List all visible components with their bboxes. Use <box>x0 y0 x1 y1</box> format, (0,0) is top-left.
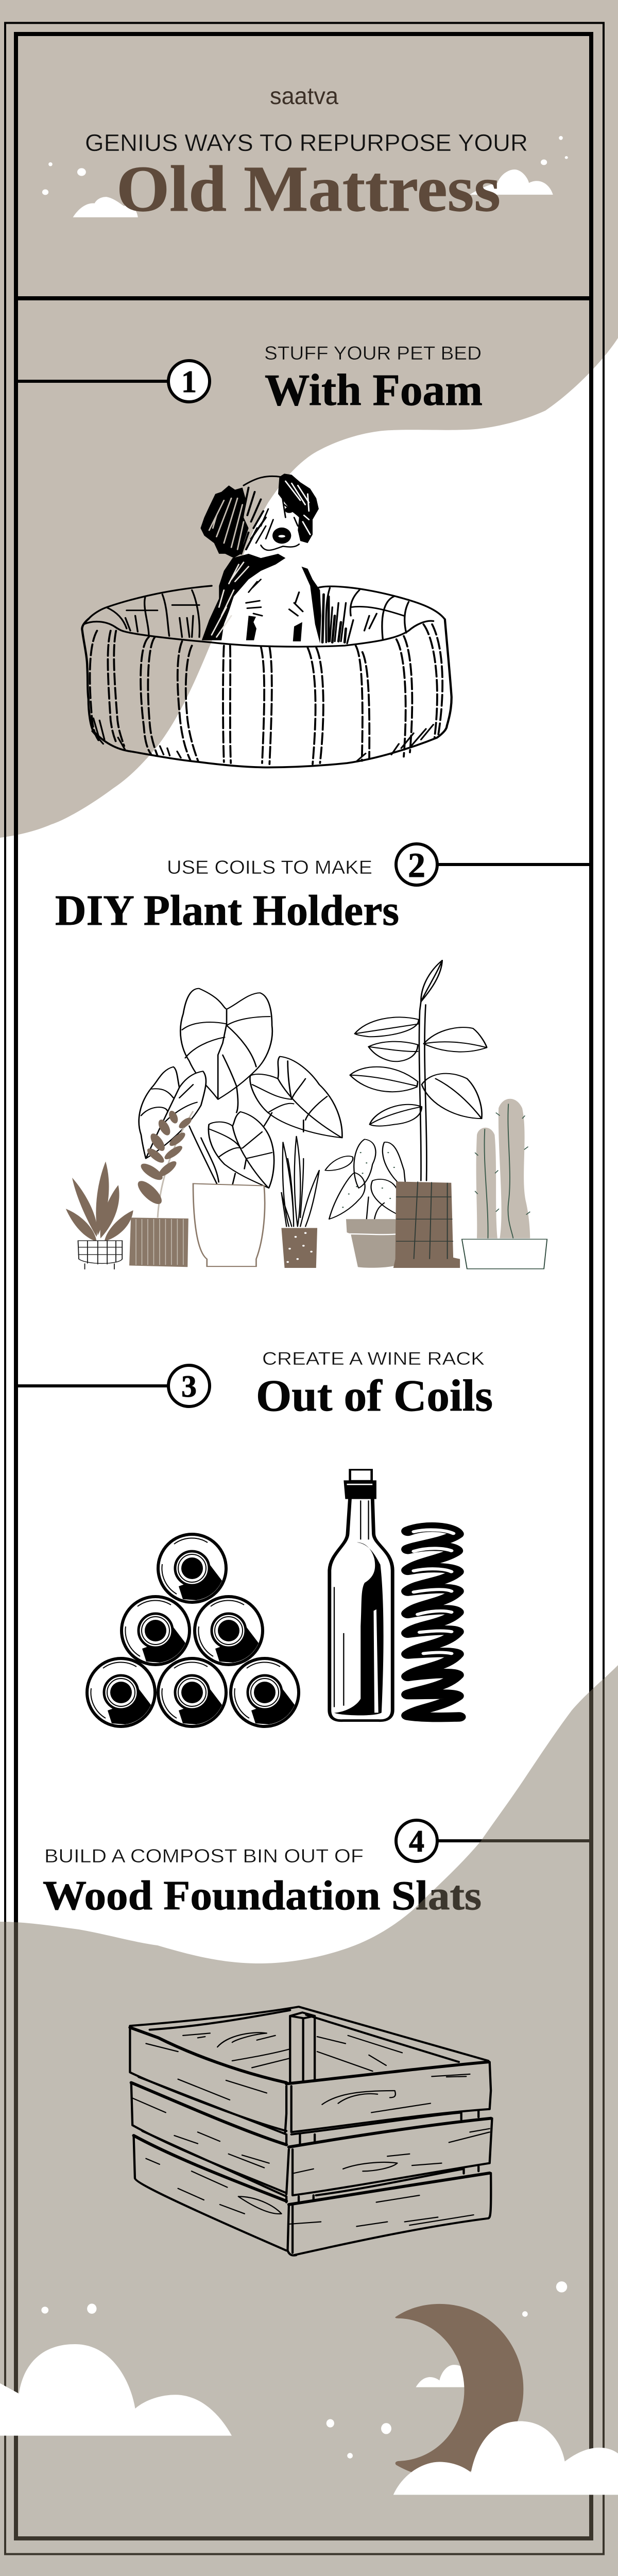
illustration: dog in pet bed <box>82 473 452 767</box>
step 3 marker <box>16 1365 210 1406</box>
illustration: mattress coil <box>408 1527 459 1717</box>
begonia in clay pot <box>325 1139 406 1268</box>
illustration: potted plants <box>66 960 547 1269</box>
step 4 marker: 4 <box>409 1824 424 1858</box>
left cloud <box>0 2344 232 2436</box>
right cloud <box>393 2421 618 2495</box>
bed stitching <box>90 624 442 764</box>
step 1 marker: 1 <box>181 365 197 399</box>
bottom scene: small cloud, moon, stars, clouds <box>0 2281 618 2495</box>
main title: Old Mattress <box>116 153 501 225</box>
stars <box>41 2281 567 2459</box>
white pot <box>193 1183 265 1266</box>
snake plant <box>281 1137 319 1268</box>
step 3 marker: 3 <box>181 1369 197 1403</box>
step 1 heading: With Foam <box>265 365 483 415</box>
dog head and body <box>200 473 346 643</box>
illustration: wooden crate <box>130 2007 492 2256</box>
step 3 kicker: CREATE A WINE RACK <box>262 1349 485 1369</box>
illustration: wine bottle <box>330 1470 392 1721</box>
step 4 heading: Wood Foundation Slats <box>43 1873 482 1919</box>
header: clouds and stars <box>42 136 568 217</box>
step 3 heading: Out of Coils <box>256 1370 493 1420</box>
cacti in white pot <box>462 1099 547 1269</box>
step 1 kicker: STUFF YOUR PET BED <box>264 343 482 364</box>
step 4 kicker: BUILD A COMPOST BIN OUT OF <box>44 1845 364 1867</box>
ficus with brown grid pot <box>350 960 487 1268</box>
zz plant in striped pot <box>129 1110 194 1267</box>
bed hatching <box>92 603 433 761</box>
step 4 marker <box>396 1820 591 1861</box>
header kicker: GENIUS WAYS TO REPURPOSE YOUR <box>85 129 528 156</box>
moon <box>395 2304 523 2478</box>
step 2 kicker: USE COILS TO MAKE <box>167 857 372 878</box>
brand logo: saatva <box>270 82 338 109</box>
step 2 heading: DIY Plant Holders <box>55 887 399 935</box>
step 1 marker <box>16 361 210 402</box>
top background blob <box>0 0 618 838</box>
bottom background blob <box>0 1665 618 2576</box>
step 2 marker <box>396 844 591 885</box>
step 2 marker: 2 <box>408 845 425 885</box>
aloe in grid pot <box>66 1161 133 1269</box>
large leafy plant <box>139 989 342 1188</box>
